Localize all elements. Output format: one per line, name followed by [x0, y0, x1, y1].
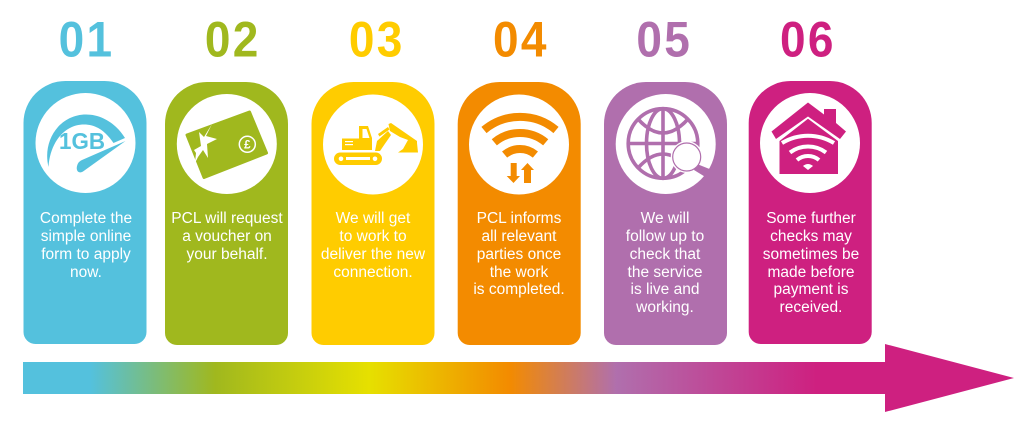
- step 05 text: the service: [628, 264, 702, 281]
- arrow: gradient timeline: [23, 344, 1014, 412]
- step 01 text: simple online: [41, 228, 131, 245]
- step 03: [312, 13, 434, 345]
- step 04: [458, 13, 581, 345]
- step 04 text: parties once: [477, 246, 561, 263]
- step 02 text: a voucher on: [182, 228, 272, 245]
- icon: gift voucher: [187, 112, 266, 178]
- step 03 text: deliver the new: [321, 246, 426, 263]
- step 04 text: PCL informs: [477, 210, 562, 227]
- icon: speed gauge: [47, 114, 125, 172]
- step 02 text: PCL will request: [171, 210, 283, 227]
- icon: gift voucher: £: [244, 140, 251, 152]
- step 04 text: is completed.: [473, 281, 565, 298]
- panel: step 04 card: [458, 82, 581, 345]
- step 01: [24, 13, 146, 344]
- step 06 text: Some further: [766, 210, 856, 227]
- number 04: 04: [493, 13, 549, 68]
- step 06: [749, 13, 872, 344]
- panel: step 02 card: [165, 82, 288, 345]
- icon circle: [36, 93, 136, 193]
- panel: step 03 card: [312, 82, 434, 345]
- step 04 text: all relevant: [482, 228, 557, 245]
- step 06 text: received.: [780, 299, 842, 316]
- number 05: 05: [636, 13, 692, 68]
- step 05 text: follow up to: [626, 228, 704, 245]
- icon: house with wifi: [772, 102, 846, 174]
- step 06 text: made before: [767, 264, 855, 281]
- step 01 text: Complete the: [40, 210, 132, 227]
- step 05 text: working.: [635, 299, 694, 316]
- step 02: [165, 13, 288, 345]
- icon: excavator: [334, 123, 418, 165]
- step 05 text: We will: [641, 210, 689, 227]
- step 05: [604, 13, 727, 345]
- number 06: 06: [780, 13, 836, 68]
- number 02: 02: [205, 13, 261, 68]
- step 01 text: form to apply: [41, 246, 131, 263]
- step 03 text: to work to: [339, 228, 407, 245]
- step 06 text: payment is: [774, 281, 849, 298]
- step 02 text: your behalf.: [186, 246, 268, 263]
- step 04 text: the work: [490, 264, 549, 281]
- step 05 text: check that: [630, 246, 701, 263]
- icon: globe with magnifier: [628, 108, 712, 178]
- icon: speed gauge: 1GB: [59, 128, 105, 154]
- icon circle: [323, 94, 423, 194]
- step 06 text: checks may: [770, 228, 852, 245]
- step 03 text: We will get: [336, 210, 411, 227]
- number 03: 03: [349, 13, 405, 68]
- icon: wifi with arrows: [484, 117, 556, 183]
- panel: step 06 card: [749, 81, 872, 344]
- step 03 text: connection.: [333, 264, 413, 281]
- icon circle: [616, 94, 716, 194]
- step 01 text: now.: [70, 264, 102, 281]
- number 01: 01: [59, 13, 114, 68]
- panel: step 05 card: [604, 82, 727, 345]
- icon circle: [760, 93, 860, 193]
- step 06 text: sometimes be: [763, 246, 859, 263]
- icon circle: [469, 94, 569, 194]
- icon circle: [177, 94, 277, 194]
- panel: step 01 card: [24, 81, 146, 344]
- step 05 text: is live and: [631, 281, 699, 298]
